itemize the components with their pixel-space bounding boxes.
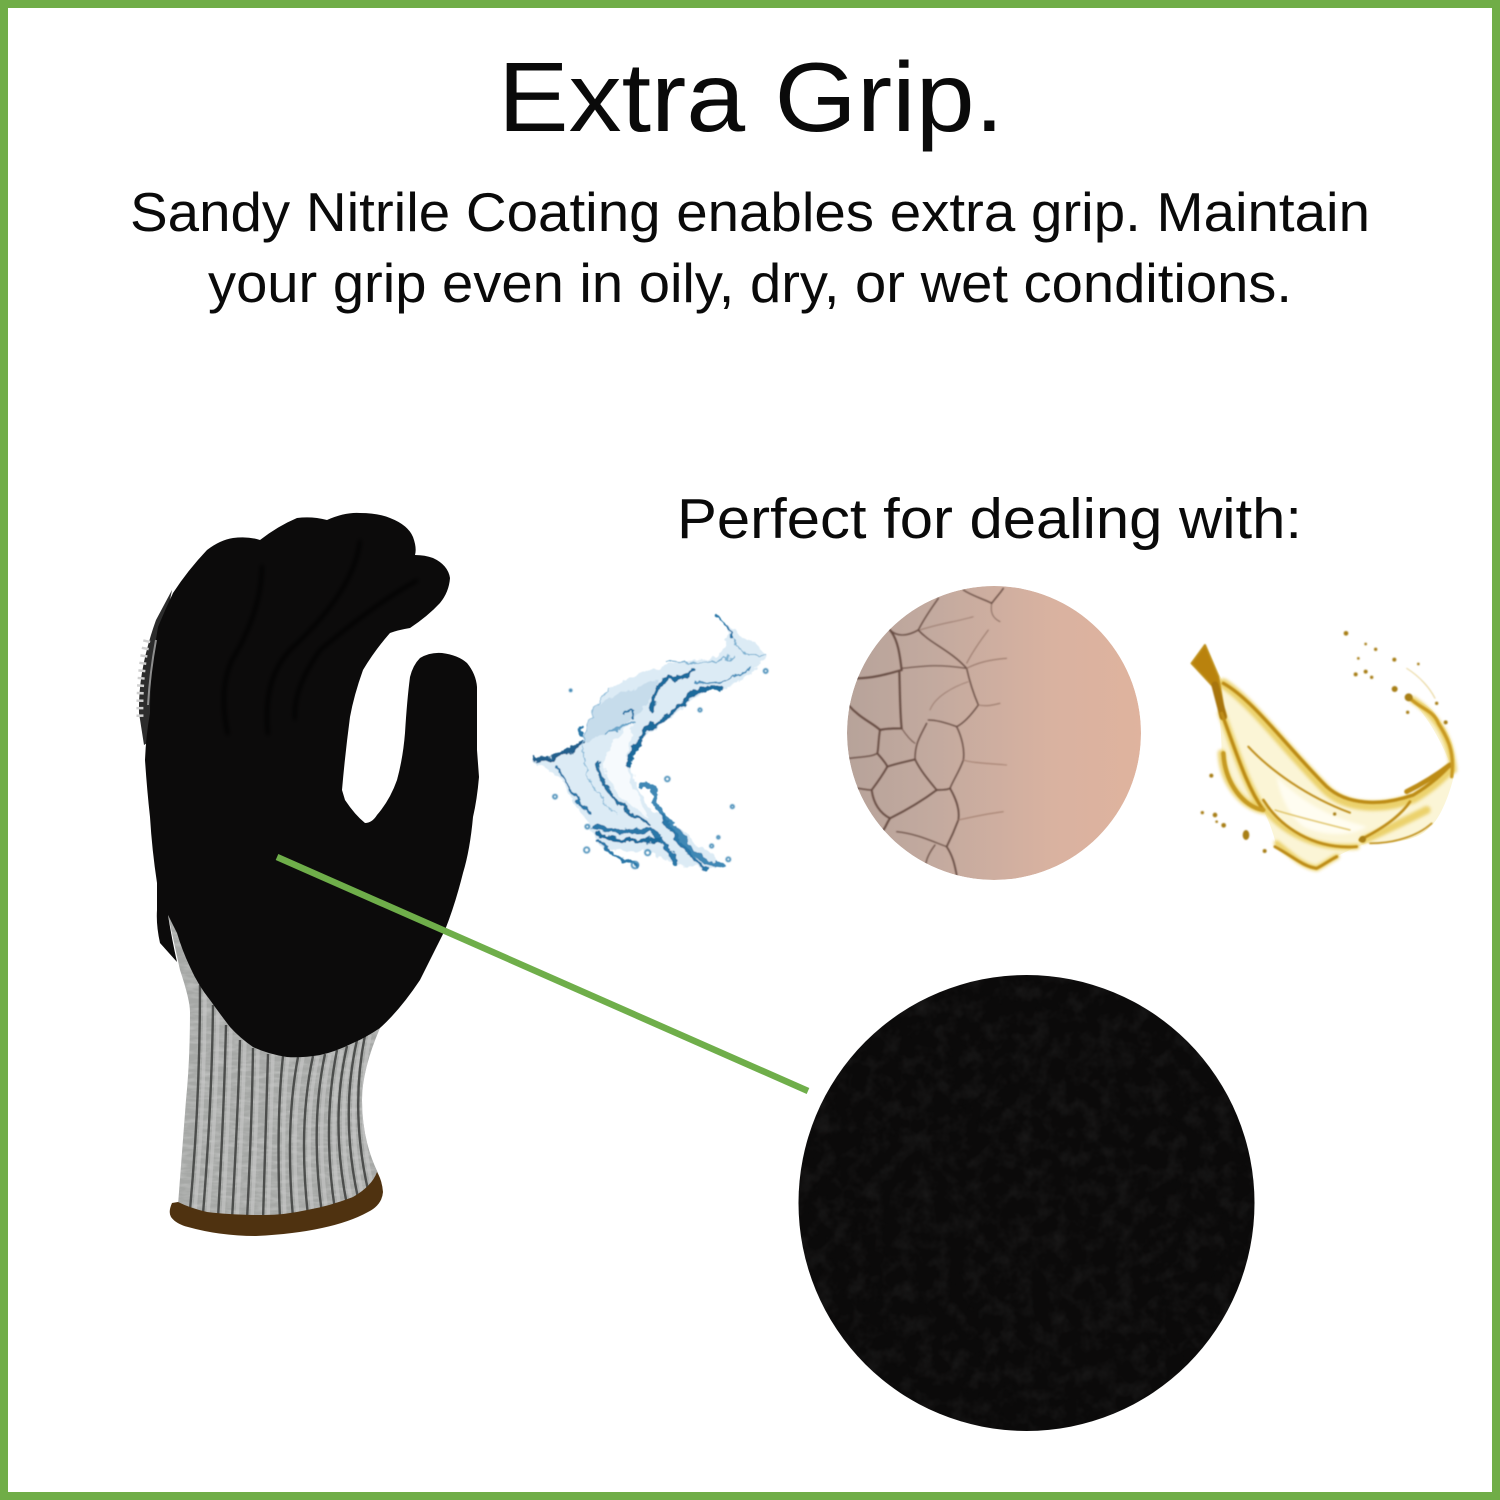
icon: glove [139,513,479,1236]
oil droplets [1201,631,1448,853]
glove palm [145,513,479,1057]
oil body [1190,644,1455,868]
glove hem [170,1172,383,1236]
water droplets [553,669,768,868]
glove cuff [165,910,385,1225]
subheading: Perfect for dealing with: [677,487,1302,551]
icon: cracked dry skin [847,586,1141,880]
oil golden edges [1192,645,1452,868]
description text: your grip even in oily, dry, or wet conditions. [208,252,1292,314]
water dark streaks [533,615,765,868]
skin cracks [848,588,1007,875]
description text: Sandy Nitrile Coating enables extra grip. Maintain [130,181,1370,243]
glove back edge [139,590,172,745]
oil broad golden glow [1222,683,1453,868]
glove ridge marks [140,640,156,718]
glove finger creases [224,540,418,735]
water body [530,615,767,870]
icon: oil splash [1190,631,1455,868]
icon: water splash [530,615,768,870]
connector line [277,857,808,1091]
description text [130,181,1370,314]
swatch: sandy nitrile texture [798,975,1255,1432]
oil pale centre [1277,777,1367,834]
water highlight [603,723,650,817]
skin base [847,586,1141,880]
title: Extra Grip. [498,42,1004,152]
